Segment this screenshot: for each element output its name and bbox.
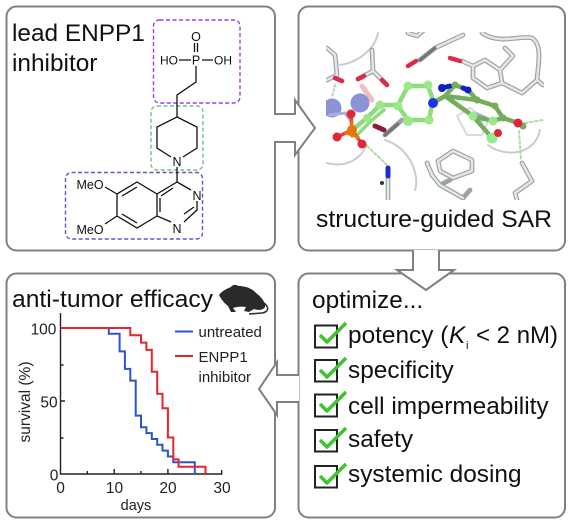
axis tick labels: 30 [213,480,231,497]
atom labels [76,30,232,237]
axis tick labels: 0 [56,480,65,497]
list items: systemic dosing [348,461,522,488]
atom labels: HO [160,54,178,68]
atom labels: O [191,30,201,44]
icon: mouse [219,285,268,314]
list items: K [449,322,467,349]
arrow: right [274,100,315,155]
heading: lead ENPP1 inhibitor: lead ENPP1 [12,20,145,47]
residue sticks: outline [327,31,543,200]
atom labels: N [172,155,182,169]
axis tick labels [31,322,231,497]
axis tick labels: 0 [50,468,59,484]
atom labels: N [172,222,182,236]
chemical structure [66,20,240,239]
axes [60,313,222,474]
residue sticks: highlight [327,31,543,200]
metal ions [322,94,370,118]
list items: cell impermeability [348,393,549,420]
dashed box: quinazoline [66,172,202,239]
ligand [332,80,526,148]
legend [175,324,262,386]
panel: lead ENPP1 inhibitor [6,6,275,250]
atom labels: P [192,54,200,68]
survival chart [17,313,262,514]
check marks [320,323,346,483]
line: ENPP1 inhibitor [60,328,206,474]
dashed box: piperidine [151,106,203,170]
atom labels: N [192,189,202,203]
list items: safety [348,426,414,453]
legend: untreated [198,324,262,341]
caption: structure-guided SAR: structure-guided SAR [316,206,552,233]
heading: lead ENPP1 inhibitor: inhibitor [12,50,97,77]
protein-ligand structure [322,31,543,200]
list items: < 2 nM) [476,322,558,349]
list items: potency ( [348,322,448,349]
faint aromatic ring [472,113,486,121]
arrow: left [259,362,299,415]
hydrogen bonds [367,120,543,166]
heading: anti-tumor efficacy: anti-tumor efficacy [12,286,214,313]
axis tick labels: 50 [40,394,58,412]
list items: specificity [348,357,455,384]
panel: anti-tumor efficacy [6,274,275,518]
atom labels: MeO [76,178,104,192]
y-axis label: survival (%) [17,362,34,442]
panel: optimize checklist [298,274,565,518]
list items: i [466,340,468,352]
line: untreated [60,328,195,474]
checklist [315,322,558,488]
atom labels: MeO [76,223,104,237]
legend: ENPP1 [198,349,248,366]
arrow: down [397,250,454,290]
axis tick labels: 20 [159,480,177,497]
x-axis label: days [121,498,151,514]
axis tick labels: 100 [31,322,57,338]
legend: inhibitor [198,369,251,386]
checkboxes [315,326,337,488]
list items [348,322,558,488]
atom labels: OH [214,54,232,68]
bonds [105,43,213,228]
axis tick labels: 10 [106,480,123,497]
dashed box: phosphonate [154,20,240,103]
panel: structure-guided SAR [298,6,565,250]
heading: optimize: optimize... [312,287,423,314]
ribbons [327,33,540,190]
residue oxygens and nitrogen [335,58,460,85]
